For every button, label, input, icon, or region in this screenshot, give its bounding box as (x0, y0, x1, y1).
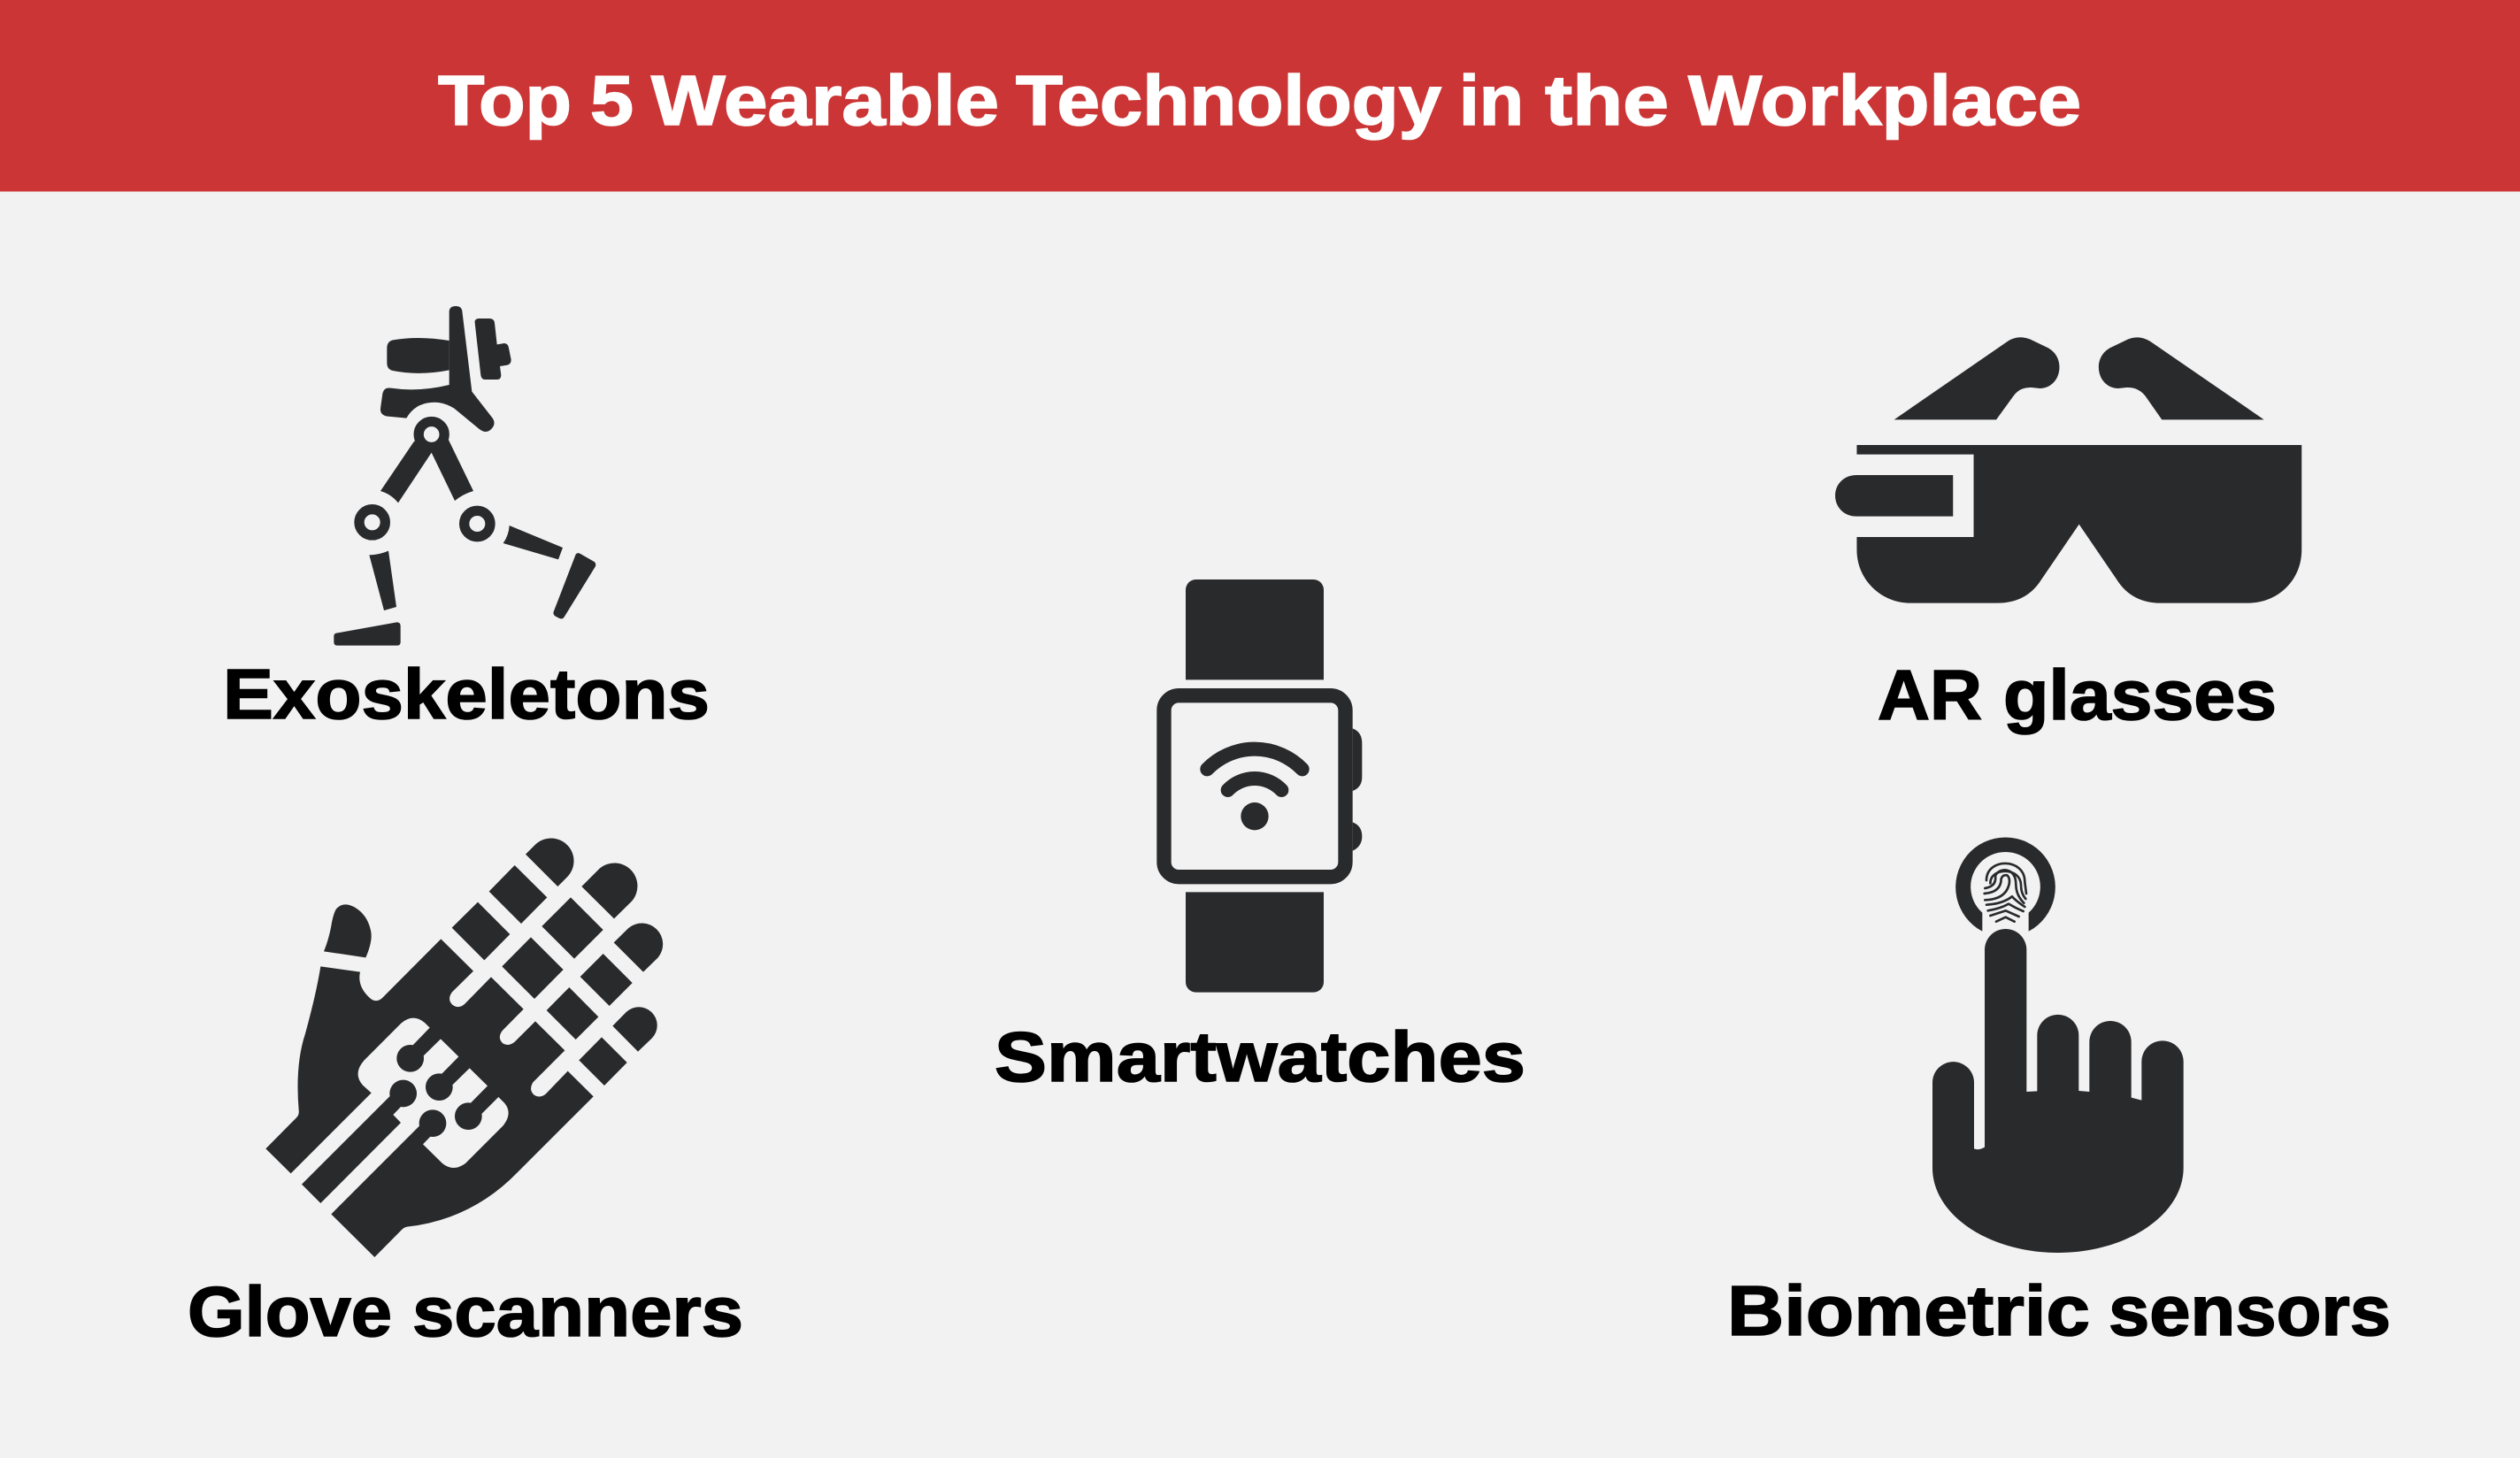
thumb tip (324, 904, 372, 957)
icon: smartwatch (1164, 579, 1362, 993)
fingerprint (1985, 863, 2026, 922)
left temple (1894, 337, 2059, 419)
title: in (1459, 61, 1524, 140)
hip joint (419, 421, 444, 447)
wifi symbol (1207, 749, 1302, 830)
icon: glove scanner (265, 838, 663, 1257)
title: the (1545, 61, 1669, 140)
waist pad (387, 338, 449, 373)
thigh struts (380, 440, 473, 503)
left knee joint (359, 510, 385, 535)
top strap (1186, 579, 1324, 679)
label: Biometric sensors: sensors (2109, 1271, 2391, 1350)
label: Glove scanners: scanners (412, 1272, 743, 1351)
back pack (475, 318, 511, 380)
title: 5 (590, 61, 634, 140)
icon: exoskeleton (334, 306, 595, 646)
label: Biometric sensors: Biometric (1727, 1271, 2090, 1350)
fingertips (526, 838, 663, 1052)
wrist strip (302, 1096, 401, 1203)
label: AR glasses: glasses (2003, 656, 2277, 734)
label: AR glasses: AR (1878, 656, 1982, 734)
title: Technology (1016, 61, 1442, 140)
right temple (2099, 337, 2264, 419)
lens (1856, 445, 2301, 603)
header banner (0, 0, 2520, 191)
side display arm (1835, 475, 1953, 517)
icon: AR glasses (1835, 337, 2301, 603)
spine and hip brace (380, 306, 495, 432)
scanner ring (1955, 837, 2055, 932)
right shin (503, 526, 563, 559)
bottom strap (1186, 892, 1324, 993)
title: Workplace (1688, 61, 2081, 140)
left foot (334, 622, 401, 646)
icon: biometric hand (1932, 837, 2184, 1253)
label: Glove scanners: Glove (188, 1272, 392, 1351)
hand body (265, 939, 594, 1257)
title: Wearable (651, 61, 999, 140)
label: Smartwatches: Smartwatches (995, 1017, 1525, 1096)
title: Top (438, 61, 572, 140)
right foot (553, 553, 595, 618)
hand (1932, 929, 2184, 1253)
circuit nodes (389, 1045, 482, 1137)
left shin (369, 551, 396, 610)
label: Exoskeletons: Exoskeletons (223, 655, 710, 733)
right knee joint (465, 510, 490, 537)
watch case (1164, 695, 1345, 877)
finger segments (452, 865, 633, 1086)
side buttons (1353, 728, 1362, 851)
